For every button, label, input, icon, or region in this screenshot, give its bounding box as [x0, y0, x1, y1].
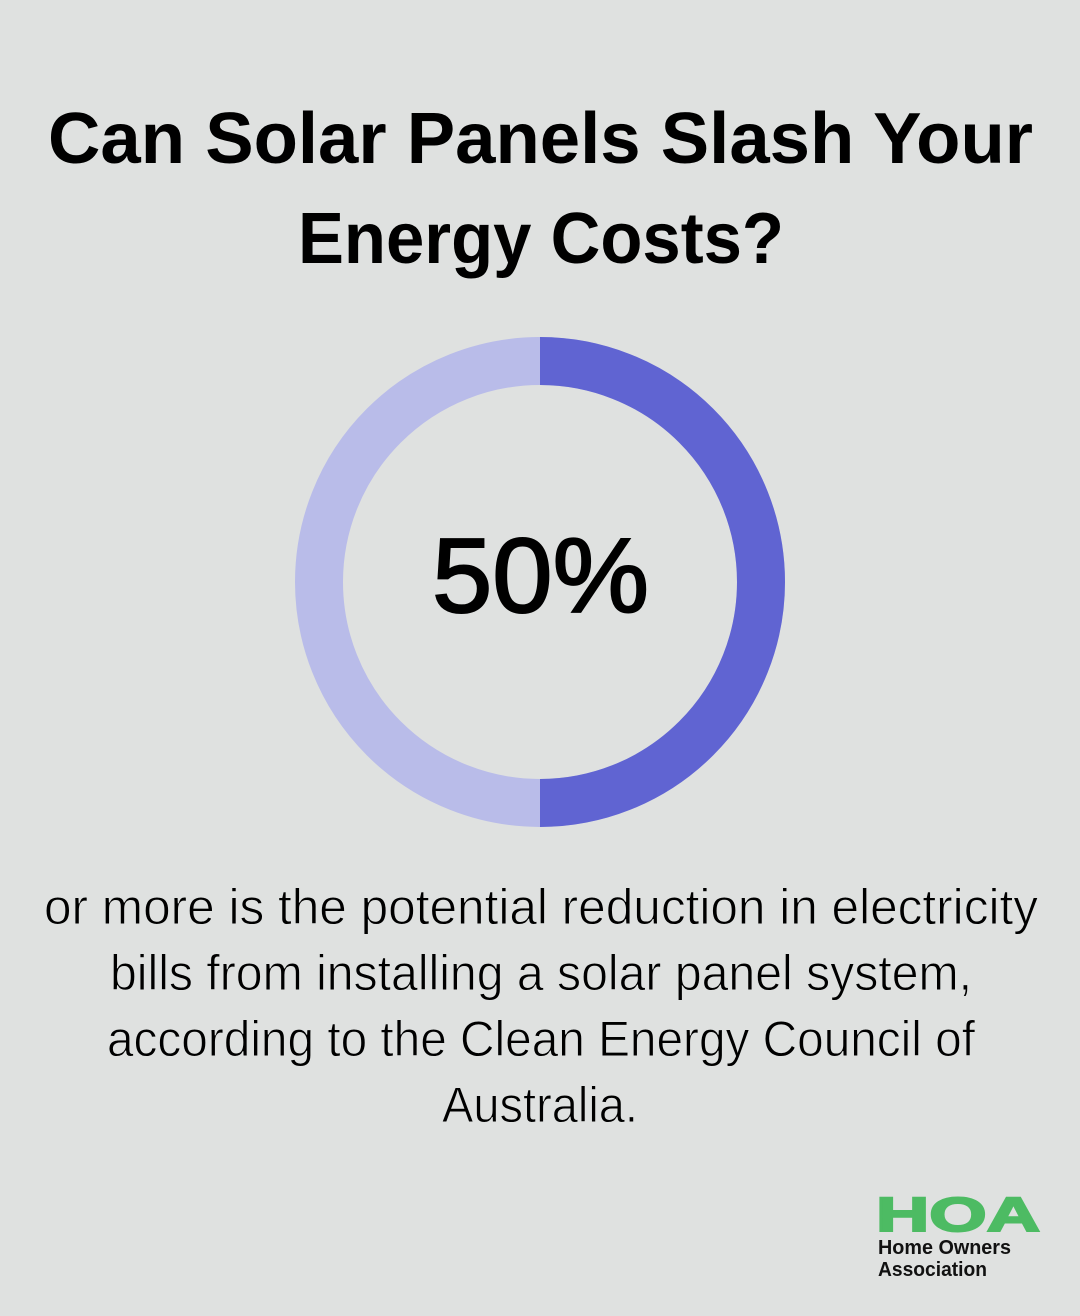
logo: Home Owners Association: HOA	[876, 1189, 1040, 1242]
description text: bills from installing a solar panel system,	[110, 945, 972, 1001]
title: Can Solar Panels Slash Your	[48, 99, 1033, 179]
title: Energy Costs?	[298, 199, 784, 279]
logo: Home Owners Association	[876, 1189, 1040, 1281]
description text: Australia.	[442, 1077, 638, 1133]
description text: or more is the potential reduction in electricity	[44, 879, 1038, 935]
description text: according to the Clean Energy Council of	[107, 1011, 975, 1067]
description text	[44, 879, 1038, 1133]
logo: Home Owners Association: Home Owners	[878, 1237, 1011, 1259]
donut chart: 50%	[319, 361, 761, 803]
title	[48, 99, 1033, 279]
logo: Home Owners Association: Association	[878, 1259, 987, 1281]
statistic: 50%: 50%	[432, 517, 649, 635]
